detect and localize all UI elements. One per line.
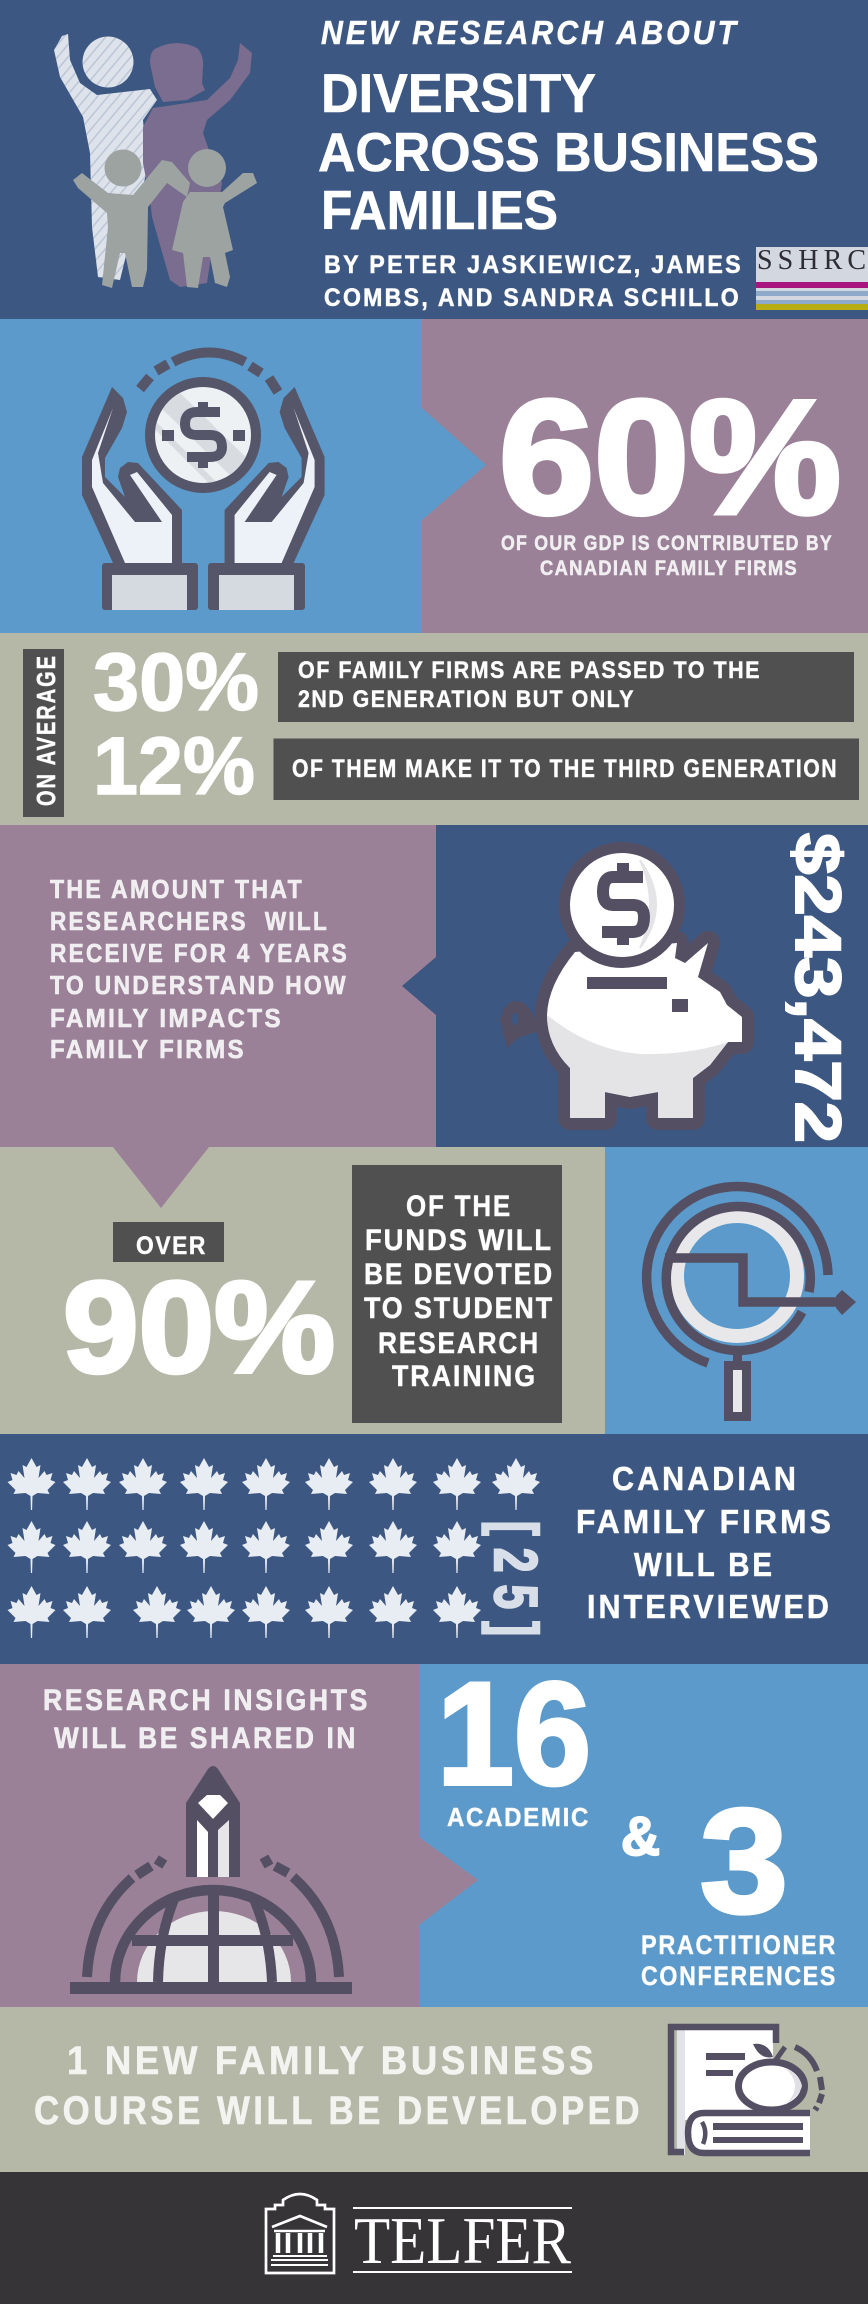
arrow: navy pointer [402,957,436,1015]
icon: piggy bank [500,848,742,1118]
icon: pencil and globe [70,1766,352,1994]
text: funding description: THE AMOUNT THAT [50,874,304,904]
text: funding description: FAMILY FIRMS [50,1034,246,1064]
stat: 90%: 90% [63,1254,335,1400]
label: on average: ON AVERAGE [31,654,61,806]
text: academic: ACADEMIC [447,1802,590,1832]
label: over [113,1222,224,1262]
icon: books and apple [671,2027,822,2155]
text: practitioner conferences: CONFERENCES [641,1961,837,1991]
arrow: purple pointer [419,1837,478,1925]
text: firms interviewed: INTERVIEWED [587,1588,832,1625]
stat: 25: [ 2 5 ] [482,1521,549,1636]
callout: funds devoted: TO STUDENT [364,1292,554,1325]
panel: student training [0,1147,868,1434]
text: firms interviewed: WILL BE [634,1546,775,1583]
callout: third generation [274,738,859,800]
logo: SSHRC: SSHRC [757,245,866,276]
text: research insights: WILL BE SHARED IN [54,1722,358,1755]
text: authors [324,251,743,312]
logo: TELFER wordmark: TELFER [354,2204,571,2278]
icon: hands holding coin [82,352,325,610]
text: research insights [43,1684,370,1755]
text: practitioner conferences [641,1930,837,1991]
panel: Canadian family firms interviewed [0,1434,868,1664]
panel: new course [0,2007,868,2172]
stat: 16: 16 [437,1652,591,1815]
heading: title: DIVERSITY [321,62,596,124]
heading: title [318,62,819,241]
icon: family of four [54,34,257,288]
stat: 12%: 12% [93,721,255,812]
stat: funding amount: $243,472 [782,833,854,1143]
heading: title: ACROSS BUSINESS [318,121,819,183]
text: firms interviewed: CANADIAN [612,1460,799,1497]
panel: 60 percent of GDP [0,319,868,633]
text: practitioner conferences: PRACTITIONER [641,1930,837,1960]
arrow: blue pointer [422,408,486,520]
text: funding description [50,874,349,1064]
logo: SSHRC [756,245,868,310]
icon: magnifier with arrow [647,1186,856,1421]
text: ampersand: & [621,1805,660,1867]
callout: 2nd generation: OF FAMILY FIRMS ARE PASSED TO THE [298,657,761,684]
callout: 2nd generation: 2ND GENERATION BUT ONLY [298,686,635,713]
label: over: OVER [136,1232,207,1260]
icons: 25 maple leaves [8,1458,540,1638]
text: firms interviewed: FAMILY FIRMS [576,1503,834,1540]
text: kicker: NEW RESEARCH ABOUT [321,14,739,51]
text: GDP caption [501,532,833,580]
panel: conferences [0,1652,868,2007]
arrow: purple pointer [113,1147,209,1208]
panel: header [0,0,868,319]
logo: Telfer crest [266,2194,334,2273]
callout: funds devoted: RESEARCH [378,1327,540,1360]
text: firms interviewed [576,1460,834,1625]
callout: funds devoted: TRAINING [392,1360,537,1393]
callout: funds devoted: FUNDS WILL [365,1224,553,1257]
callout: funds devoted: BE DEVOTED [364,1258,554,1291]
label: on average [23,649,64,817]
callout: funds devoted [352,1165,562,1423]
stat: 30%: 30% [93,637,259,728]
text: funding description: RESEARCHERS WILL [50,906,329,936]
text: funding description: RECEIVE FOR 4 YEARS [50,938,349,968]
text: new course: 1 NEW FAMILY BUSINESS [67,2039,597,2083]
panel: research funding [0,825,868,1147]
text: research insights: RESEARCH INSIGHTS [43,1684,370,1717]
callout: funds devoted: OF THE [406,1190,512,1223]
panel: footer [0,2172,868,2304]
heading: title: FAMILIES [321,179,558,241]
text: funding description: TO UNDERSTAND HOW [50,970,348,1000]
text: new course [34,2039,643,2133]
text: authors: COMBS, AND SANDRA SCHILLO [324,284,741,312]
text: new course: COURSE WILL BE DEVELOPED [34,2089,643,2133]
panel: succession rates [0,633,868,825]
text: GDP caption: CANADIAN FAMILY FIRMS [540,557,798,580]
stat: 3: 3 [700,1779,788,1944]
stat: 60%: 60% [499,367,841,548]
callout: 2nd generation [278,652,854,722]
text: authors: BY PETER JASKIEWICZ, JAMES [324,251,743,279]
text: funding description: FAMILY IMPACTS [50,1003,283,1033]
